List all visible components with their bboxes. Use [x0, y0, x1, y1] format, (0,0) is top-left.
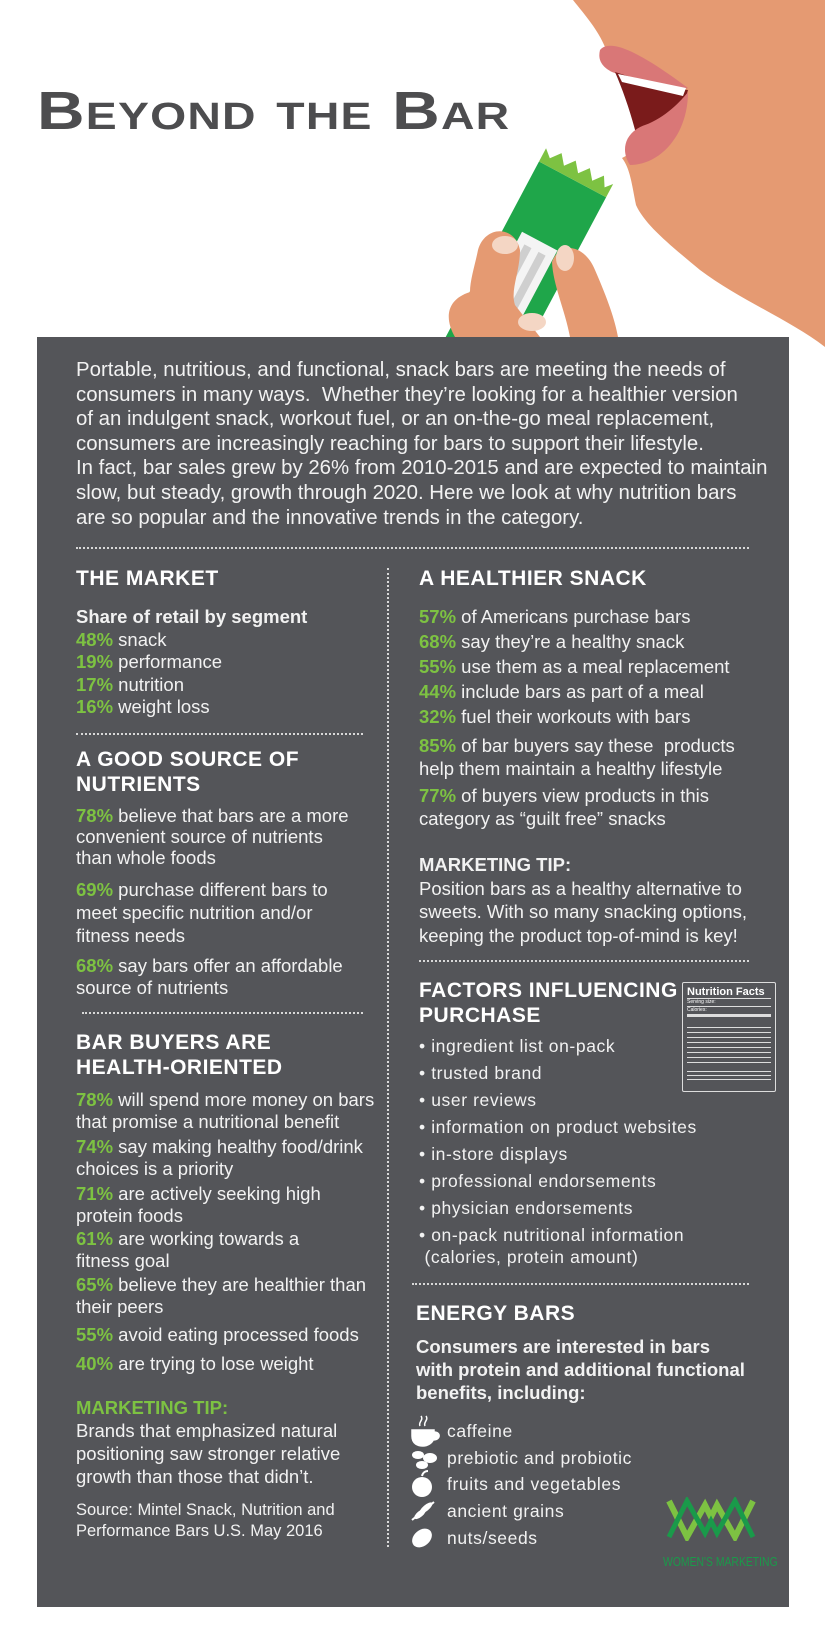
icon: nutrition facts label: Calories: [687, 1007, 707, 1013]
text: nutrients stats [76, 805, 349, 868]
heading: factors: PURCHASE [419, 1004, 541, 1027]
heading: the market: THE MARKET [76, 567, 219, 590]
text: 85% of bar buyers say these products [419, 735, 735, 756]
text: healthier stats: 55% use them as a meal replacement [419, 656, 730, 677]
list: factors: • ingredient list on-pack [419, 1036, 615, 1056]
list: energy bar benefits: ancient grains [447, 1501, 564, 1521]
text: buyer stats: that promise a nutritional benefit [76, 1111, 339, 1132]
marketing tip right: sweets. With so many snacking options, [419, 901, 747, 922]
heading: good source [76, 748, 299, 796]
heading: factors [419, 979, 678, 1027]
text: fitness needs [76, 925, 185, 946]
source: Performance Bars U.S. May 2016 [76, 1522, 323, 1540]
logo: women's marketing: WOMEN'S MARKETING [663, 1554, 778, 1569]
icon: nutrition facts label: Nutrition Facts [687, 986, 765, 998]
list: energy bar benefits: fruits and vegetables [447, 1474, 621, 1494]
marketing tip left: growth than those that didn’t. [76, 1466, 314, 1487]
marketing tip right [419, 854, 747, 946]
heading: bar buyers: BAR BUYERS ARE [76, 1031, 271, 1054]
text: healthier stats: 57% of Americans purchase bars [419, 606, 690, 627]
intro text: slow, but steady, growth through 2020. Here we look at why nutrition bars [76, 482, 736, 504]
intro text: In fact, bar sales grew by 26% from 2010-2015 and are expected to maintain [76, 457, 767, 479]
text: energy bars intro: with protein and additional functional [416, 1359, 745, 1380]
heading: factors: FACTORS INFLUENCING [419, 979, 678, 1002]
text: market shares: 48% snack [76, 628, 166, 650]
text: healthier stats: 68% say they’re a healthy snack [419, 631, 684, 652]
text: market shares: 16% weight loss [76, 696, 210, 717]
heading: good source: A GOOD SOURCE OF [76, 748, 299, 771]
intro text: consumers in many ways. Whether they’re looking for a healthier version [76, 384, 738, 406]
text: healthier stats: 32% fuel their workouts with bars [419, 706, 690, 727]
icon: nutrition facts label: Serving size: [687, 999, 716, 1005]
intro text: consumers are increasingly reaching for bars to support their lifestyle. [76, 433, 704, 455]
text: market shares [76, 606, 308, 717]
heading: bar buyers: HEALTH-ORIENTED [76, 1056, 283, 1079]
text: energy bars intro: benefits, including: [416, 1382, 586, 1403]
intro text: are so popular and the innovative trends in the category. [76, 507, 583, 529]
marketing tip left: Brands that emphasized natural [76, 1420, 337, 1441]
text: buyer stats: protein foods [76, 1205, 183, 1226]
text: buyer stats: 55% avoid eating processed foods [76, 1324, 359, 1345]
title: Beyond the Bar [37, 81, 510, 141]
text: nutrients stats: than whole foods [76, 847, 216, 868]
list: factors: • in-store displays [419, 1144, 568, 1164]
marketing tip right: Position bars as a healthy alternative to [419, 878, 742, 898]
text: market shares: 19% performance [76, 651, 222, 672]
intro text [76, 359, 767, 529]
marketing tip right: MARKETING TIP: [419, 854, 571, 875]
text: buyer stats: 40% are trying to lose weight [76, 1353, 314, 1374]
list: factors: • physician endorsements [419, 1198, 633, 1218]
marketing tip left: positioning saw stronger relative [76, 1443, 340, 1464]
text: buyer stats: their peers [76, 1296, 163, 1317]
list: factors: • trusted brand [419, 1063, 542, 1083]
list: energy bar benefits [447, 1421, 632, 1548]
list: factors: • user reviews [419, 1090, 537, 1110]
text: market shares: 17% nutrition [76, 674, 184, 694]
marketing tip left [76, 1397, 340, 1487]
panel: main [37, 337, 789, 1607]
heading: bar buyers [76, 1031, 283, 1079]
intro text: of an indulgent snack, workout fuel, or an on-the-go meal replacement, [76, 408, 714, 430]
text: source of nutrients [76, 977, 228, 998]
text: help them maintain a healthy lifestyle [419, 758, 722, 779]
text: 69% purchase different bars to [76, 879, 328, 900]
text: meet specific nutrition and/or [76, 902, 313, 923]
text: healthier stats: 44% include bars as part of a meal [419, 681, 704, 702]
text: buyer stats: fitness goal [76, 1250, 170, 1271]
text: category as “guilt free” snacks [419, 808, 666, 829]
text: buyer stats: 65% believe they are healthier than [76, 1274, 366, 1295]
icon: nutrition facts label [682, 982, 776, 1092]
list: factors [419, 1036, 697, 1267]
intro text: Portable, nutritious, and functional, snack bars are meeting the needs of [76, 359, 726, 381]
text: buyer stats: 78% will spend more money on bars [76, 1089, 374, 1110]
text: buyer stats: choices is a priority [76, 1158, 233, 1179]
logo: women's marketing [663, 1497, 778, 1569]
marketing tip left: MARKETING TIP: [76, 1397, 228, 1418]
heading: good source: NUTRIENTS [76, 773, 201, 796]
text: buyer stats: 61% are working towards a [76, 1228, 299, 1249]
text: healthier stats [419, 606, 730, 727]
heading: energy bars: ENERGY BARS [416, 1302, 575, 1325]
list: factors: • information on product websites [419, 1117, 697, 1137]
icons: energy bar benefits [411, 1416, 440, 1548]
text: nutrients stats: 78% believe that bars are a more [76, 805, 349, 826]
list: energy bar benefits: prebiotic and probiotic [447, 1448, 632, 1468]
source: Source: Mintel Snack, Nutrition and [76, 1501, 335, 1519]
text: 68% say bars offer an affordable [76, 955, 343, 976]
text: energy bars intro [416, 1336, 745, 1403]
text: energy bars intro: Consumers are interested in bars [416, 1336, 710, 1357]
list: energy bar benefits: nuts/seeds [447, 1528, 538, 1548]
heading: healthier snack: A HEALTHIER SNACK [419, 567, 647, 590]
text: 77% of buyers view products in this [419, 785, 709, 806]
list: energy bar benefits: caffeine [447, 1421, 513, 1441]
marketing tip right: keeping the product top-of-mind is key! [419, 924, 738, 946]
text: buyer stats: 74% say making healthy food/drink [76, 1136, 363, 1157]
text: nutrients stats: convenient source of nutrients [76, 826, 323, 847]
list: factors: (calories, protein amount) [424, 1247, 638, 1267]
list: factors: • professional endorsements [419, 1171, 656, 1191]
list: factors: • on-pack nutritional information [419, 1225, 684, 1245]
illustration: face eating bar [446, 0, 825, 347]
text: market shares: Share of retail by segment [76, 606, 307, 627]
text: buyer stats [76, 1089, 374, 1374]
source [76, 1501, 335, 1540]
text: buyer stats: 71% are actively seeking high [76, 1183, 321, 1204]
